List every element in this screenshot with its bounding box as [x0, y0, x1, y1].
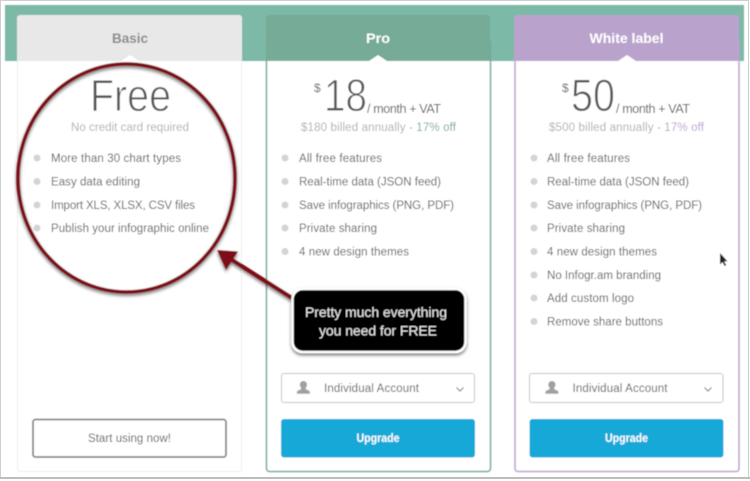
Pro heading: Pro	[366, 30, 390, 46]
Pro feature list: Private sharing	[299, 223, 377, 235]
White label feature list: 4 new design themes	[547, 246, 657, 258]
Pro feature list	[282, 153, 454, 258]
Pro feature list: Real-time data (JSON feed)	[299, 176, 441, 188]
Pro feature list: 4 new design themes	[299, 246, 409, 258]
White label card	[515, 40, 739, 472]
White label feature list: No Infogr.am branding	[547, 270, 661, 282]
Pro feature list: All free features	[299, 153, 382, 165]
icon: mouse cursor	[720, 253, 727, 266]
White label feature list	[530, 153, 702, 328]
White label header notch	[618, 55, 636, 61]
White label feature list: Real-time data (JSON feed)	[547, 176, 689, 188]
White label feature list: Save infographics (PNG, PDF)	[547, 200, 702, 212]
panel: White label plan	[514, 15, 739, 472]
Basic price: Free	[90, 70, 171, 121]
callout: Pretty much everything	[305, 304, 447, 320]
White label billing note: $500 billed annually - 17% off	[549, 122, 705, 134]
White label account dropdown: Individual Account	[572, 383, 668, 395]
Start using now button: Start using now!	[88, 433, 171, 445]
Pro price: / month + VAT	[367, 102, 441, 116]
callout: you need for FREE	[319, 322, 437, 338]
Pro price	[314, 70, 441, 121]
callout	[292, 289, 466, 352]
Pro card	[266, 40, 490, 472]
Basic feature list: Publish your infographic online	[51, 223, 209, 235]
White label feature list: Add custom logo	[547, 293, 634, 305]
Basic feature list: More than 30 chart types	[51, 153, 181, 165]
Pro price: $	[314, 81, 321, 95]
annotation circle	[18, 64, 235, 292]
Pro account dropdown: Individual Account	[324, 383, 420, 395]
Pro upgrade button	[281, 419, 475, 458]
Pro account dropdown	[282, 374, 474, 402]
panel: Basic plan	[17, 15, 242, 472]
Pro billing note: $180 billed annually - 17% off	[301, 122, 457, 134]
Basic feature list	[34, 153, 209, 235]
Basic heading: Basic	[112, 30, 148, 46]
White label header	[514, 15, 739, 61]
White label heading: White label	[590, 30, 664, 46]
Basic header	[17, 15, 242, 61]
Pro feature list: Save infographics (PNG, PDF)	[299, 200, 454, 212]
icon: person	[297, 381, 310, 394]
White label price: / month + VAT	[616, 102, 690, 116]
annotation arrow	[217, 250, 292, 298]
Pro header notch	[369, 55, 387, 61]
icon: chevron	[704, 388, 712, 391]
White label feature list: All free features	[547, 153, 630, 165]
White label price: 50	[571, 70, 615, 121]
icon: person	[545, 381, 558, 394]
White label price: $	[562, 81, 569, 95]
green header band	[5, 5, 744, 61]
White label upgrade button: Upgrade	[605, 431, 648, 445]
Pro header	[266, 15, 490, 61]
Basic feature list: Easy data editing	[51, 176, 140, 188]
icon: chevron	[456, 388, 464, 391]
Basic header notch	[121, 55, 139, 61]
Start using now button	[33, 420, 226, 457]
Pro price: 18	[324, 70, 367, 121]
Pro upgrade button: Upgrade	[356, 431, 400, 445]
Basic price note: No credit card required	[71, 122, 189, 134]
Basic feature list: Import XLS, XLSX, CSV files	[51, 200, 195, 212]
White label upgrade button	[530, 419, 724, 458]
White label feature list: Remove share buttons	[547, 316, 663, 328]
White label feature list: Private sharing	[547, 223, 625, 235]
White label price	[562, 70, 690, 121]
Basic card	[18, 16, 242, 472]
White label account dropdown	[530, 374, 723, 402]
panel: Pro plan	[266, 15, 490, 472]
